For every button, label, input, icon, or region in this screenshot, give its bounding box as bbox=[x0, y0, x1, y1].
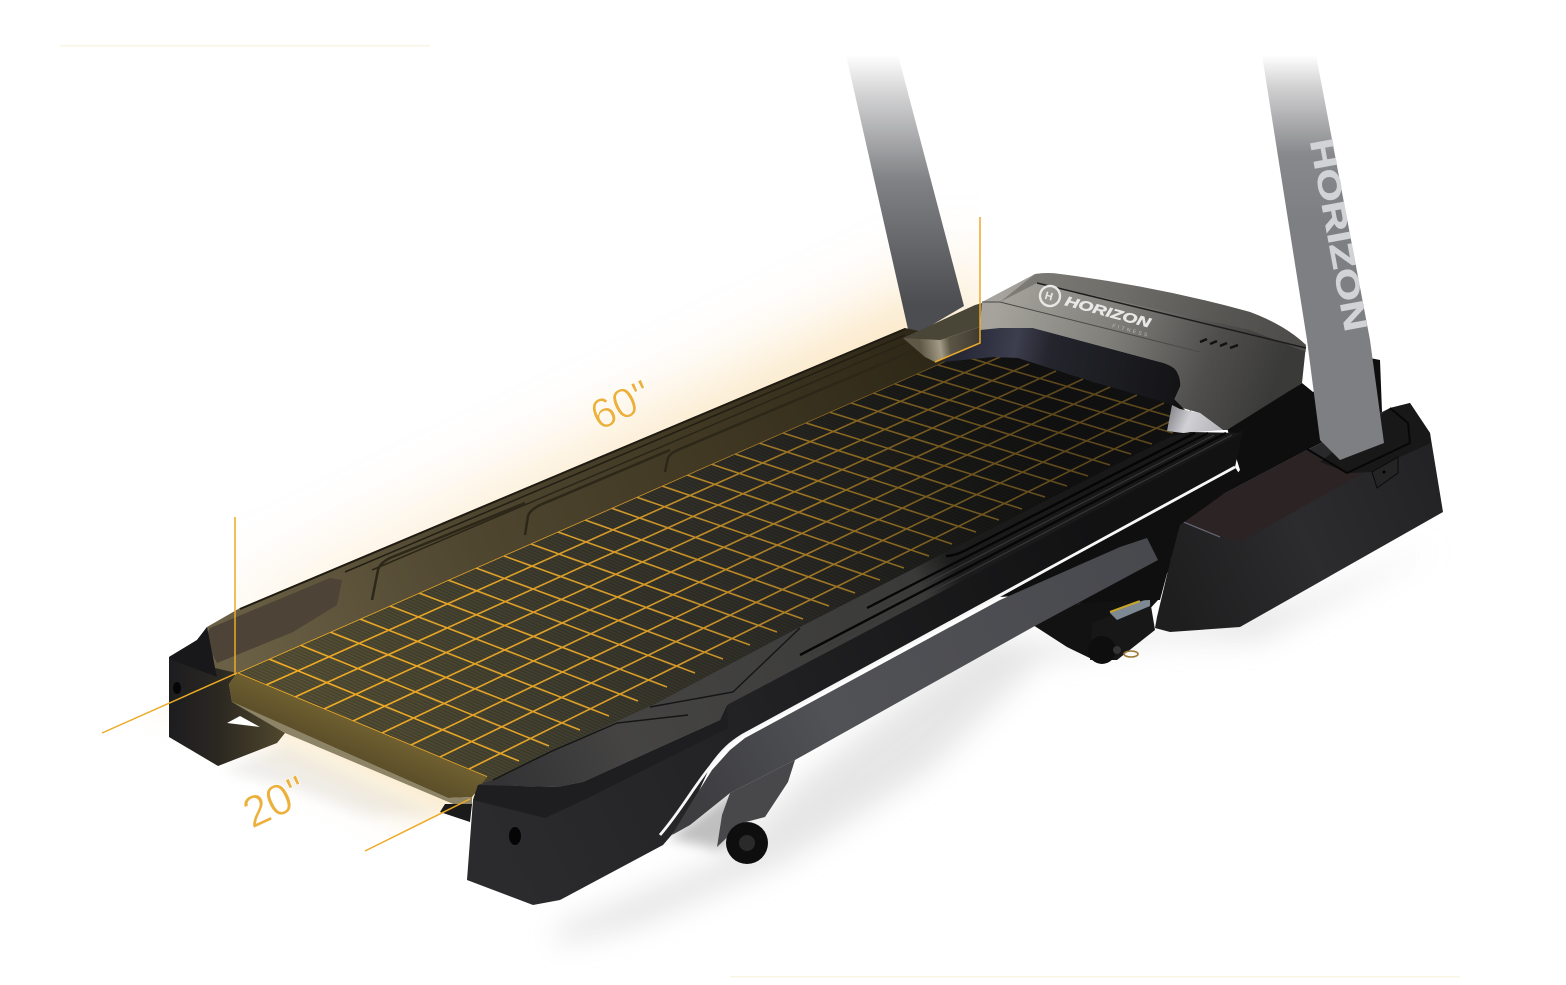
motor base bbox=[1155, 403, 1443, 632]
base latch bbox=[1372, 457, 1398, 488]
grey lower frame bbox=[672, 538, 1158, 835]
orange glow below front edge bbox=[110, 680, 480, 850]
cap hole bbox=[227, 716, 260, 727]
length dimension line bbox=[935, 217, 980, 362]
rear wheel unit bbox=[1033, 590, 1158, 664]
near side rail and body bbox=[467, 430, 1243, 905]
faint bottom rule bbox=[730, 976, 1460, 978]
rear housing bbox=[1140, 358, 1382, 600]
side wall bbox=[467, 430, 1243, 905]
black handle recess bbox=[943, 328, 1180, 405]
left upright bbox=[846, 55, 964, 338]
black joint under rail end bbox=[1000, 467, 1243, 627]
running belt with grid bbox=[237, 340, 1200, 800]
faint top rule bbox=[60, 45, 430, 46]
brand on upright: HORIZON bbox=[1303, 136, 1374, 334]
width dimension lines bbox=[102, 517, 470, 851]
cap bevel bbox=[473, 705, 728, 818]
floor shadow bbox=[225, 545, 1440, 945]
right upright bbox=[1262, 55, 1384, 460]
white stripe bbox=[660, 467, 1235, 835]
hood vent marks bbox=[1200, 339, 1238, 348]
brand logo on hood: H bbox=[1043, 290, 1054, 304]
rail end panel bbox=[205, 578, 342, 663]
upright collar bbox=[1307, 408, 1410, 473]
left front cap bbox=[169, 627, 285, 766]
brand logo on hood bbox=[1036, 284, 1154, 339]
roller bbox=[228, 673, 487, 822]
belt grid lines bbox=[237, 348, 1193, 777]
rail ridges bbox=[493, 433, 1232, 780]
front wheel and bracket bbox=[717, 760, 795, 864]
base top cushion bbox=[1180, 450, 1372, 542]
label: 60 inches: 60" bbox=[583, 371, 659, 439]
brand logo on hood: HORIZON bbox=[1063, 293, 1153, 331]
brand logo on hood: FITNESS bbox=[1112, 323, 1149, 339]
left side rail bbox=[205, 328, 975, 673]
white corner piece bbox=[1167, 405, 1223, 433]
upright base plate bbox=[903, 303, 982, 362]
rail top surface bbox=[478, 432, 1242, 787]
label: 20 inches: 20" bbox=[236, 766, 315, 838]
console hood bbox=[980, 273, 1306, 430]
orange glow behind deck bbox=[235, 265, 980, 640]
base right top bbox=[1320, 403, 1431, 473]
cap bolt bbox=[509, 827, 521, 845]
